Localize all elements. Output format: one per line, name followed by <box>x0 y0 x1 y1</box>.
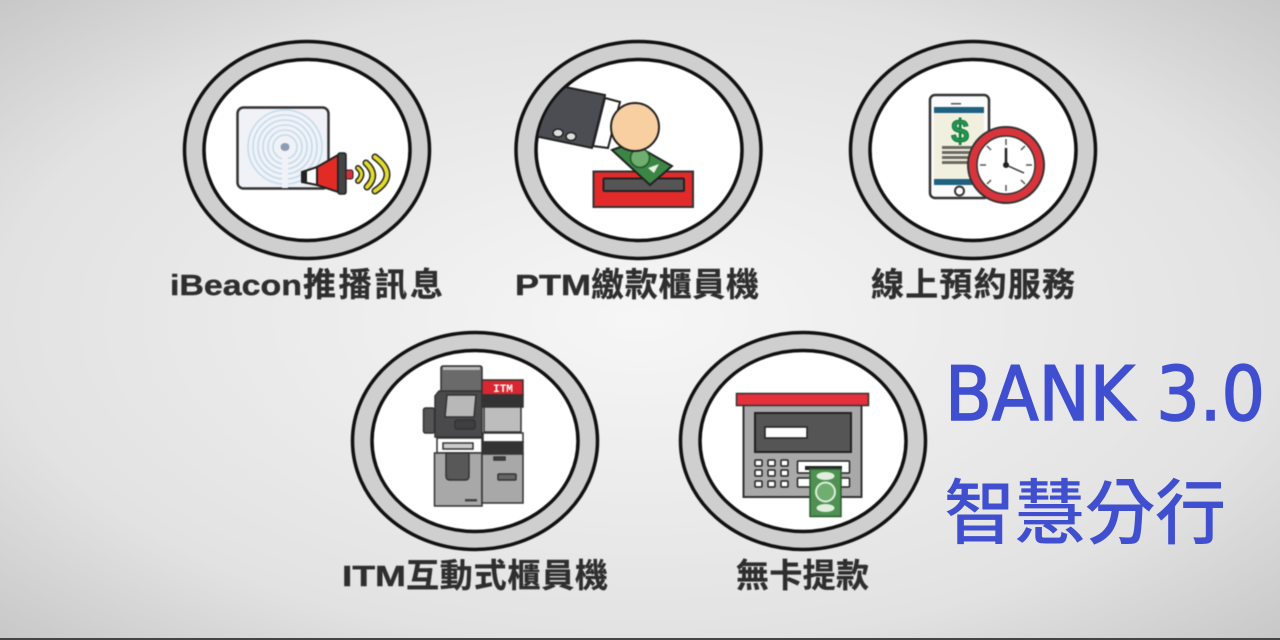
ring: ITM <box>352 332 598 550</box>
label: PTM <box>515 258 759 306</box>
ring: cardless withdrawal <box>680 332 926 550</box>
panel: ITM <box>342 332 608 597</box>
icon: banknote from ATM <box>805 466 842 516</box>
label: online booking: 線上預約服務 <box>871 258 1075 306</box>
icon: deposit slot <box>594 172 693 207</box>
icon: hand and sleeve <box>538 86 661 153</box>
ring: online booking <box>850 42 1096 258</box>
icon: clock <box>968 127 1044 203</box>
icon: ATM <box>736 394 868 497</box>
label: ITM: 互動式櫃員機 <box>406 549 608 597</box>
icon: banknote <box>612 143 672 185</box>
panel: PTM <box>515 42 761 306</box>
icon: ITM kiosk: ITM <box>493 384 513 396</box>
subtitle: smart branch: 智慧分行 <box>944 457 1226 559</box>
label: ITM: ITM <box>342 561 406 593</box>
icon: sound waves <box>358 157 387 191</box>
ring: PTM <box>516 42 761 258</box>
label: iBeacon: 推播訊息 <box>303 258 443 306</box>
panel: iBeacon <box>170 42 443 306</box>
label: iBeacon <box>170 258 443 306</box>
panel: online booking <box>850 42 1096 306</box>
label: PTM: 繳款櫃員機 <box>591 258 759 306</box>
label: iBeacon: iBeacon <box>170 270 302 302</box>
label: PTM: PTM <box>515 270 591 302</box>
icon: beacon tile <box>238 108 328 188</box>
icon: megaphone <box>302 153 353 194</box>
icon: smartphone: $ <box>951 113 969 149</box>
panel: cardless withdrawal <box>680 332 926 597</box>
label: cardless withdrawal: 無卡提款 <box>736 549 869 597</box>
ring: iBeacon <box>184 42 430 258</box>
icon: ITM kiosk <box>424 366 523 506</box>
icon: smartphone <box>930 95 989 198</box>
